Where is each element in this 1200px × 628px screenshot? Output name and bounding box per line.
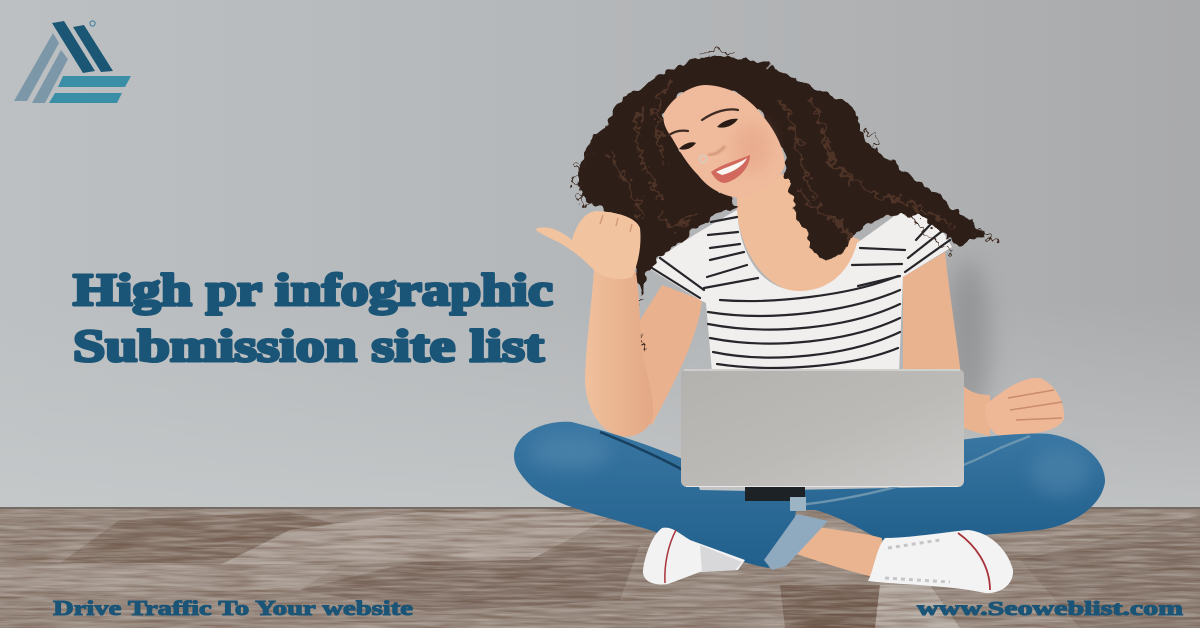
rolled jeans cuff xyxy=(764,514,828,570)
title xyxy=(73,264,553,371)
footer tagline: Drive Traffic To Your website xyxy=(53,596,413,620)
neck and chest xyxy=(737,170,860,292)
forearm and thumb-pointing fist xyxy=(535,211,653,437)
upper arm behind xyxy=(625,285,702,425)
photo: woman with laptop xyxy=(514,50,1105,593)
background: wooden floor xyxy=(0,507,1200,628)
right sneaker xyxy=(868,530,1013,593)
nose ring xyxy=(699,155,707,163)
wall shadow behind person xyxy=(946,260,990,420)
eyebrows xyxy=(669,109,738,135)
face xyxy=(663,85,785,198)
striped t-shirt xyxy=(647,210,952,372)
hair mass xyxy=(578,57,985,296)
logo xyxy=(14,21,131,103)
title: High pr infographic xyxy=(73,264,553,315)
laptop xyxy=(681,369,964,487)
jeans xyxy=(514,422,1105,568)
left sneaker xyxy=(643,528,745,584)
mouth xyxy=(711,155,750,183)
title: Submission site list xyxy=(73,320,545,371)
footer website url: www.Seoweblist.com xyxy=(917,598,1184,620)
right arm and clasped hands xyxy=(903,252,1064,436)
eyes xyxy=(679,142,696,150)
ankle xyxy=(790,526,882,578)
loose curls xyxy=(574,50,995,350)
